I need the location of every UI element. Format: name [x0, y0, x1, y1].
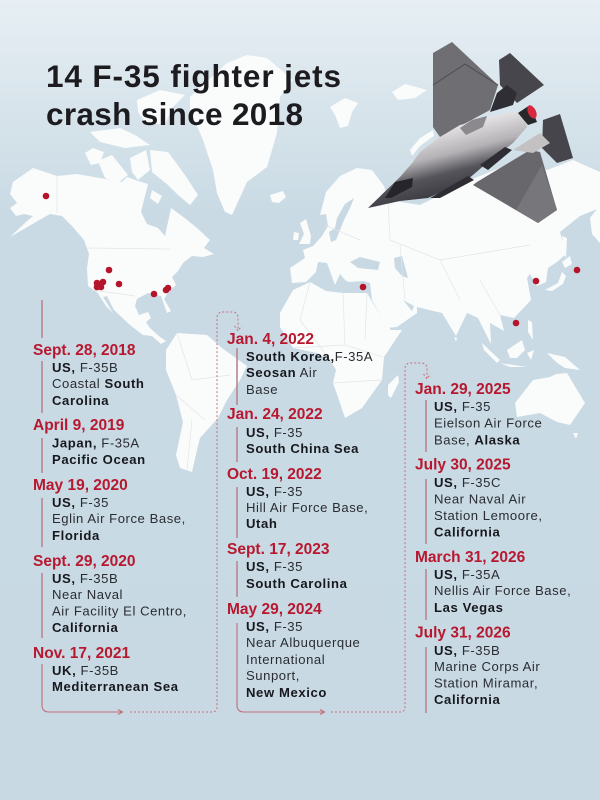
connector: column two to three [237, 623, 324, 714]
entry: March 31, 2026: US, F-35A [434, 567, 500, 582]
map: South America [166, 333, 247, 472]
entry: May 19, 2020: Eglin Air Force Base, [52, 511, 186, 526]
map: Arctic islands [85, 90, 198, 205]
entry: Jan. 4, 2022 [227, 331, 373, 405]
entry: July 31, 2026 [415, 624, 540, 713]
timeline column 2 [227, 331, 373, 700]
entry: May 29, 2024: US, F-35 [246, 619, 303, 634]
entry: Jan. 24, 2022: US, F-35 [246, 425, 303, 440]
map: Kamchatka and Japan [545, 205, 600, 291]
map: Eurasia [290, 160, 600, 344]
entry: Sept. 29, 2020: Near Naval [52, 587, 123, 602]
entry: Nov. 17, 2021: UK, F-35B [52, 663, 119, 678]
map: Madagascar [388, 375, 399, 398]
entry: Jan. 29, 2025 [415, 381, 542, 452]
entry: Jan. 4, 2022: Base [246, 382, 278, 397]
connector: column one to two [42, 664, 122, 714]
entry: July 30, 2025: Near Naval Air [434, 492, 526, 506]
entry: Jan. 29, 2025: Eielson Air Force [434, 416, 542, 430]
entry: March 31, 2026: March 31, 2026 [415, 549, 526, 566]
map: country borders [57, 176, 530, 470]
entry: March 31, 2026: Nellis Air Force Base, [434, 583, 571, 598]
entry: Sept. 17, 2023 [227, 541, 348, 597]
entry: July 31, 2026: California [434, 692, 501, 707]
map: Australia [515, 373, 585, 425]
entry: July 30, 2025: July 30, 2025 [415, 456, 511, 474]
map: Iceland, Svalbard and northern isles [270, 84, 578, 439]
entry: Jan. 4, 2022: Jan. 4, 2022 [227, 331, 314, 348]
entry: Nov. 17, 2021 [33, 645, 179, 694]
jet lower tail [542, 114, 573, 163]
entry: Oct. 19, 2022 [227, 466, 368, 538]
map: North America [10, 168, 214, 344]
jet intake shadow [430, 147, 512, 198]
jet nozzle [518, 105, 537, 125]
entry: Jan. 4, 2022: Seosan Air [246, 365, 317, 380]
entry: May 19, 2020: US, F-35 [52, 495, 109, 510]
entry: Sept. 28, 2018: Coastal South [52, 376, 145, 391]
jet upper tail [499, 53, 544, 103]
entry: Sept. 17, 2023: South Carolina [246, 576, 348, 591]
entry: Sept. 28, 2018: Sept. 28, 2018 [33, 342, 136, 359]
entry: May 29, 2024: International [246, 652, 325, 667]
entry: Jan. 29, 2025: Jan. 29, 2025 [415, 381, 511, 398]
jet lower wing [473, 150, 557, 223]
entry: Oct. 19, 2022: Hill Air Force Base, [246, 500, 368, 515]
entry: Jan. 24, 2022: Jan. 24, 2022 [227, 406, 323, 423]
entry: May 29, 2024: Sunport, [246, 668, 300, 683]
entry: Sept. 29, 2020: Sept. 29, 2020 [33, 553, 136, 570]
entry: April 9, 2019 [33, 417, 146, 473]
entry: May 19, 2020: Florida [52, 528, 100, 543]
title: 14 F-35 fighter jets [46, 58, 341, 94]
map: Greenland [190, 55, 293, 215]
entry: July 30, 2025 [415, 456, 543, 544]
title [46, 58, 341, 132]
entry: July 31, 2026: July 31, 2026 [415, 624, 511, 642]
jet upper wing [433, 42, 498, 137]
entry: July 31, 2026: Station Miramar, [434, 676, 538, 690]
crash site markers [43, 193, 580, 326]
entry: Sept. 29, 2020 [33, 553, 187, 638]
entry: Jan. 24, 2022: South China Sea [246, 441, 359, 456]
entry: July 30, 2025: US, F-35C [434, 475, 501, 490]
icon: F-35 fighter jet [368, 42, 573, 223]
timeline column 3 [415, 381, 571, 713]
entry: May 29, 2024: New Mexico [246, 685, 327, 700]
entry: Jan. 4, 2022: South Korea,F-35A [246, 349, 373, 364]
entry: May 19, 2020: May 19, 2020 [33, 477, 128, 494]
entry: May 29, 2024: May 29, 2024 [227, 601, 322, 618]
entry: Jan. 29, 2025: US, F-35 [434, 399, 491, 414]
entry: May 29, 2024: Near Albuquerque [246, 635, 360, 650]
entry: April 9, 2019: Japan, F-35A [52, 436, 140, 450]
map: Africa [280, 282, 402, 418]
entry: Sept. 29, 2020: Air Facility El Centro, [52, 604, 187, 618]
entry: Sept. 28, 2018 [33, 342, 145, 413]
entry: Sept. 28, 2018: US, F-35B [52, 360, 118, 375]
entry: Oct. 19, 2022: Oct. 19, 2022 [227, 466, 322, 483]
entry: March 31, 2026 [415, 549, 571, 620]
jet ventral fin [513, 133, 550, 153]
entry: April 9, 2019: April 9, 2019 [33, 417, 125, 434]
jet canopy frame [460, 116, 487, 135]
map: seas cut into Eurasia [329, 198, 414, 327]
entry: May 19, 2020 [33, 477, 186, 547]
entry: Nov. 17, 2021: Nov. 17, 2021 [33, 645, 130, 662]
timeline flow connectors [42, 312, 430, 714]
entry: July 31, 2026: Marine Corps Air [434, 659, 540, 674]
entry: Jan. 29, 2025: Base, Alaska [434, 432, 520, 448]
entry: Oct. 19, 2022: Utah [246, 516, 278, 531]
entry: May 29, 2024 [227, 601, 360, 700]
entry: Sept. 17, 2023: US, F-35 [246, 559, 303, 574]
entry: July 30, 2025: California [434, 524, 501, 540]
jet dark fin [490, 85, 517, 112]
entry: Sept. 28, 2018: Carolina [52, 393, 109, 408]
entry: Jan. 24, 2022 [227, 406, 359, 462]
map: Southeast Asia islands [454, 320, 580, 370]
entry: Sept. 29, 2020: California [52, 620, 119, 635]
world map [10, 55, 600, 472]
entry: Sept. 17, 2023: Sept. 17, 2023 [227, 541, 330, 558]
entry: April 9, 2019: Pacific Ocean [52, 452, 146, 467]
entry: March 31, 2026: Las Vegas [434, 600, 503, 615]
jet fuselage [368, 112, 527, 208]
title: crash since 2018 [46, 96, 303, 132]
entry: Nov. 17, 2021: Mediterranean Sea [52, 679, 179, 694]
entry: July 30, 2025: Station Lemoore, [434, 508, 543, 523]
entry: Sept. 29, 2020: US, F-35B [52, 571, 118, 586]
start line [41, 300, 43, 338]
timeline column 1 [33, 300, 187, 694]
entry: Oct. 19, 2022: US, F-35 [246, 484, 303, 499]
entry: July 31, 2026: US, F-35B [434, 643, 500, 658]
jet cockpit [385, 178, 413, 198]
jet exhaust [525, 104, 539, 120]
